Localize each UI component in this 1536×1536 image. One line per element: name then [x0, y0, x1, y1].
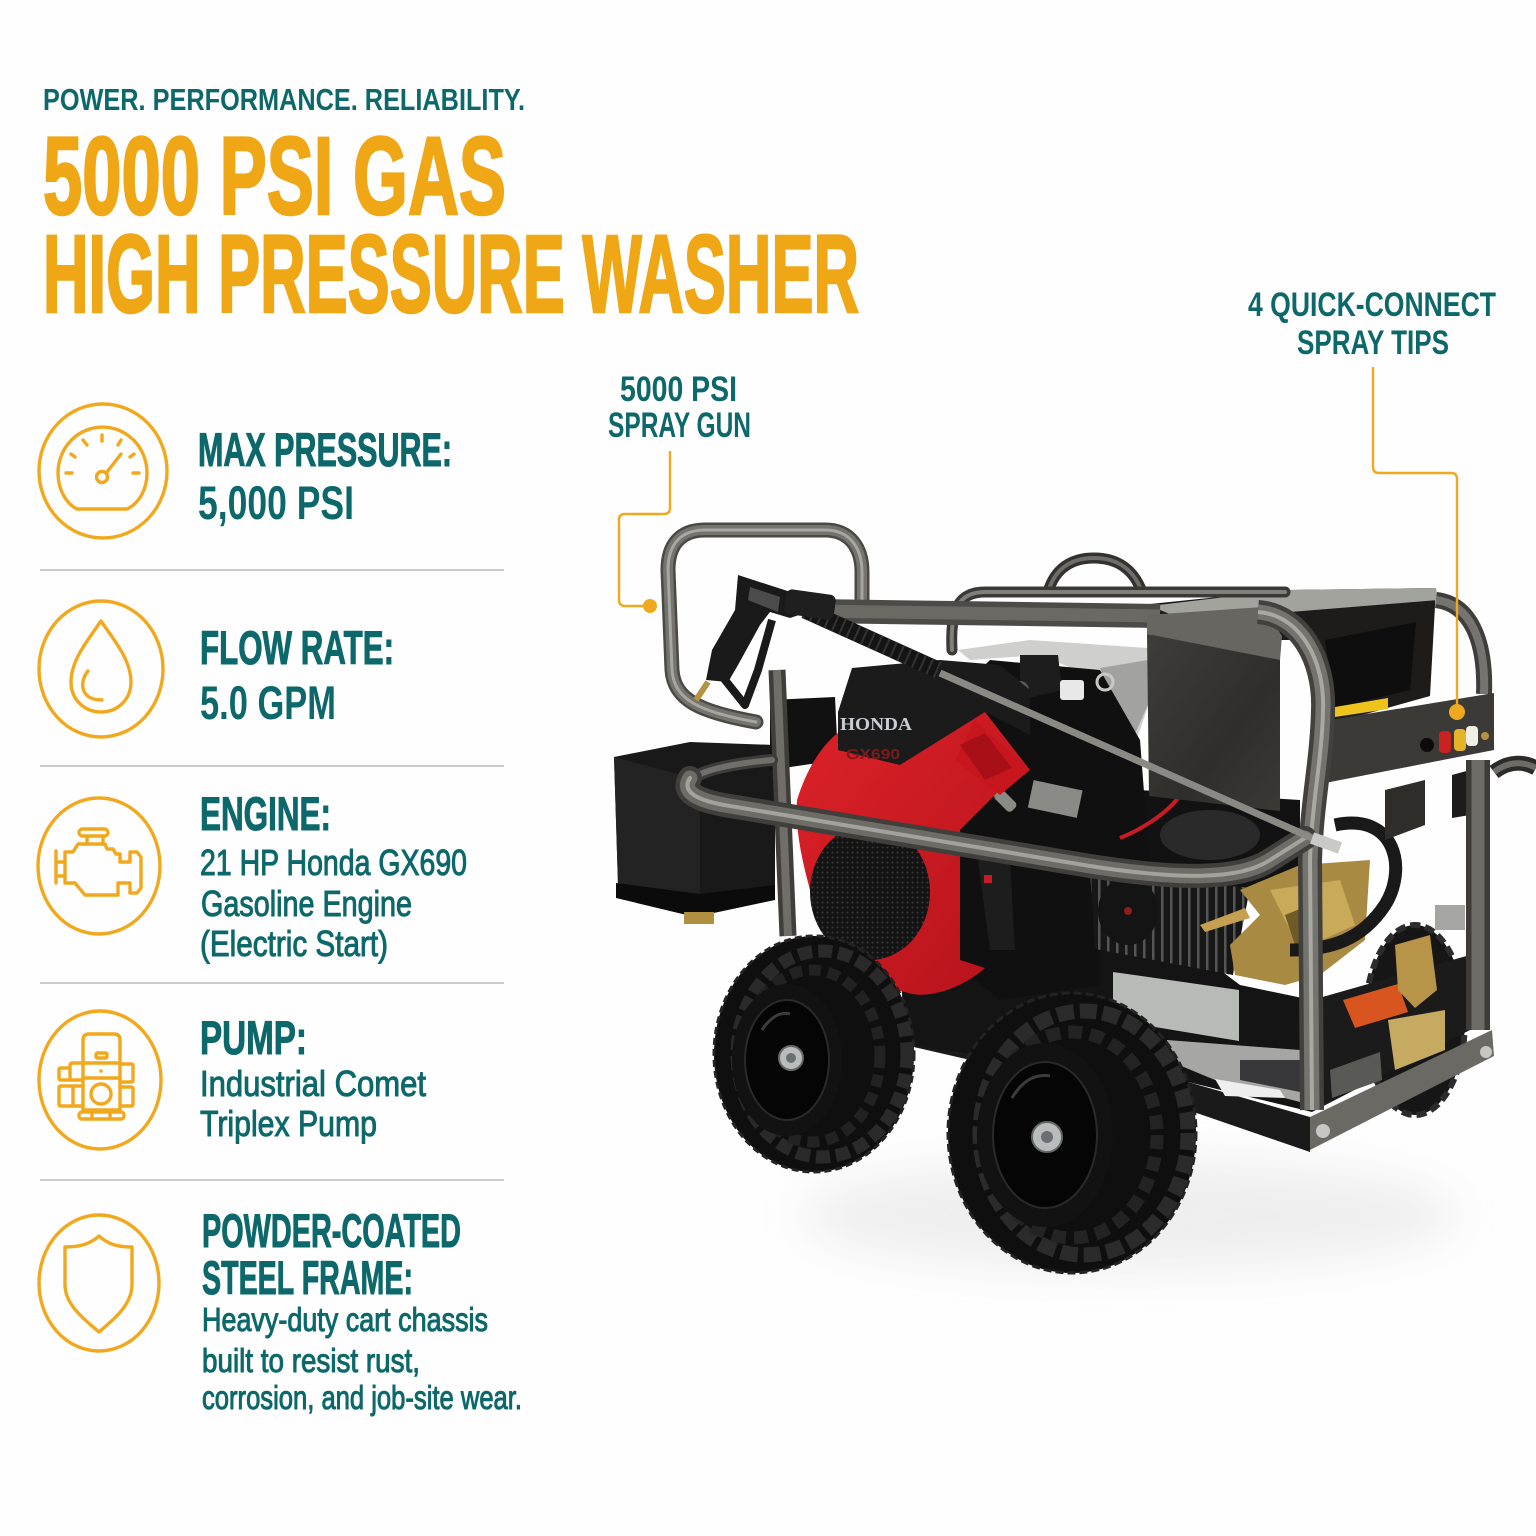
text: flow rate: [200, 621, 394, 729]
callout line: spray tips: [1373, 367, 1457, 712]
text: pump: Industrial Comet: [200, 1063, 426, 1104]
high-pressure hose: [1290, 823, 1396, 950]
text: pump: Triplex Pump: [200, 1103, 377, 1144]
text: steel frame: [202, 1204, 522, 1416]
product illustration: pressure washer: [614, 530, 1536, 1273]
chassis front plate: [1310, 1030, 1494, 1150]
text: max pressure: [198, 423, 452, 529]
front guard tube: [687, 760, 1305, 876]
title: HIGH PRESSURE WASHER: [43, 213, 859, 336]
panel: specifications: [38, 404, 522, 1416]
engine cover with Honda badge: [838, 660, 1030, 765]
text: flow rate: FLOW RATE:: [200, 621, 394, 674]
text: engine: [200, 787, 467, 964]
engine cover with Honda badge: GX690: [846, 746, 900, 763]
callout line: spray gun: [619, 451, 670, 606]
aluminium engine top: [958, 640, 1150, 760]
icon: shield: [39, 1215, 159, 1351]
pump and cooling fins: [1090, 860, 1370, 985]
engine cover with Honda badge: HONDA: [840, 714, 912, 734]
text: steel frame: POWDER-COATED: [202, 1204, 461, 1257]
text: engine: (Electric Start): [200, 923, 388, 964]
icon: water drop: [39, 601, 163, 737]
unloader valve and orange knob: [1343, 905, 1465, 1070]
header: [43, 82, 859, 336]
tagline: POWER. PERFORMANCE. RELIABILITY.: [43, 82, 525, 117]
icon: pump: [39, 1011, 161, 1149]
text: max pressure: 5,000 PSI: [198, 476, 354, 529]
side control panel: [1325, 693, 1494, 840]
chassis base: [900, 880, 1470, 1152]
fuel tank: [614, 697, 838, 924]
rear box and top plate: [1150, 588, 1438, 724]
callout label: spray tips: [1248, 286, 1496, 362]
spray gun and wand: [696, 575, 1340, 848]
text: steel frame: built to resist rust,: [202, 1342, 420, 1379]
text: steel frame: Heavy-duty cart chassis: [202, 1301, 488, 1338]
engine red shroud: [797, 712, 1030, 995]
text: steel frame: corrosion, and job-site wear.: [202, 1379, 522, 1416]
callout dot: spray tips: [1449, 704, 1465, 720]
fan grille: [810, 824, 930, 960]
front frame tube: [1258, 612, 1323, 1110]
right front wheel: [948, 993, 1196, 1273]
callout label: spray gun: SPRAY GUN: [608, 406, 751, 445]
callout dot: spray gun: [643, 599, 657, 613]
ground shadow: [800, 1160, 1460, 1270]
text: max pressure: MAX PRESSURE:: [198, 423, 452, 476]
title: 5000 PSI GAS: [43, 115, 506, 238]
arch tube: [952, 558, 1285, 650]
text: flow rate: 5.0 GPM: [200, 676, 336, 729]
sheet metal engine panel: [1147, 607, 1282, 811]
frame tubes: [777, 600, 1536, 1030]
text: pump: [200, 1011, 426, 1144]
spec: max pressure: [39, 404, 452, 538]
rear wheel: [1365, 925, 1465, 1115]
text: steel frame: STEEL FRAME:: [202, 1251, 413, 1304]
callout: spray tips: [1248, 286, 1496, 720]
text: engine: 21 HP Honda GX690: [200, 842, 467, 883]
engine body: [950, 655, 1300, 1000]
icon: pressure gauge: [39, 404, 167, 538]
callout: spray gun: [608, 370, 751, 613]
text: engine: ENGINE:: [200, 787, 331, 840]
spec: engine: [38, 787, 467, 964]
callout label: spray gun: 5000 PSI: [620, 370, 737, 409]
spec: steel frame: [39, 1204, 522, 1416]
callout label: spray gun: [608, 370, 751, 445]
spec: flow rate: [39, 601, 394, 737]
silver pump bracket: [1113, 972, 1239, 1041]
spec: pump: [39, 1011, 426, 1149]
title: [43, 115, 859, 336]
text: pump: PUMP:: [200, 1011, 307, 1064]
callout label: spray tips: SPRAY TIPS: [1297, 324, 1449, 362]
rear handle tube: [668, 530, 862, 722]
left front wheel: [714, 936, 914, 1172]
quick-connect spray tips: [1420, 726, 1489, 753]
text: engine: Gasoline Engine: [201, 883, 412, 924]
icon: engine: [38, 798, 160, 934]
